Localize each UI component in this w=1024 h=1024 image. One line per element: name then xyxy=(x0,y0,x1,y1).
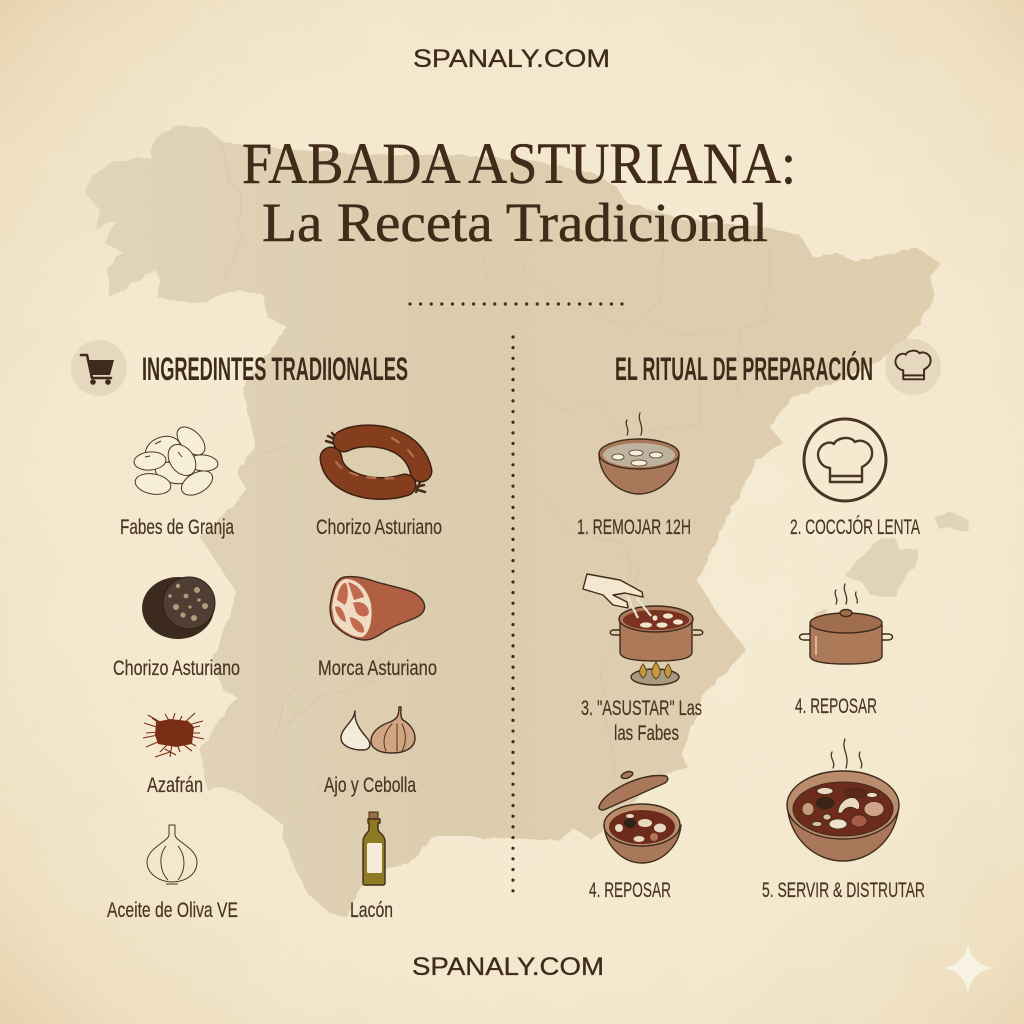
mainland silhouette xyxy=(85,125,940,917)
preparation heading xyxy=(615,339,941,395)
icon: bowl with lifted lid xyxy=(599,770,681,863)
icon: olive oil bottle xyxy=(363,812,385,885)
ingredient: morca xyxy=(318,577,437,680)
title line 1: FABADA ASTURIANA: xyxy=(242,131,796,196)
label: 4. REPOSAR xyxy=(795,695,877,718)
label: Fabes de Granja xyxy=(120,516,234,539)
label: Aceite de Oliva VE xyxy=(107,899,238,922)
step 5: resting bowl xyxy=(589,770,681,902)
icon: blood sausage xyxy=(142,577,215,639)
icon: hand, pot and burner xyxy=(583,574,703,685)
ingredient: morcilla xyxy=(113,577,240,680)
ingredient: aceite xyxy=(107,825,238,922)
label line 1: 3. "ASUSTAR" Las xyxy=(581,697,702,720)
label: 5. SERVIR & DISTRUTAR xyxy=(762,879,925,902)
panel: preparation xyxy=(577,339,941,902)
label: Chorizo Asturiano xyxy=(316,516,442,539)
title line 2: La Receta Tradicional xyxy=(262,192,768,253)
brand top: SPANALY.COM xyxy=(413,45,610,73)
Mallorca xyxy=(845,538,918,597)
ingredients heading xyxy=(71,340,408,396)
brand bottom: SPANALY.COM xyxy=(412,953,604,981)
label: Chorizo Asturiano xyxy=(113,657,240,680)
icon: chef hat in circle xyxy=(804,419,886,501)
step 4 xyxy=(795,584,892,718)
map region borders xyxy=(222,145,770,810)
icon: garlic bulb outline xyxy=(147,825,197,884)
icon: chorizo ring xyxy=(326,433,425,492)
label: Morca Asturiano xyxy=(318,657,437,680)
icon: beans xyxy=(133,422,219,500)
label xyxy=(581,697,702,745)
Ibiza xyxy=(810,609,828,622)
icon: soaking bowl xyxy=(599,413,679,494)
ingredient: ajo y cebolla xyxy=(324,707,416,797)
step 6: serve xyxy=(762,739,925,902)
icon: ham xyxy=(330,577,425,640)
icon: sparkle xyxy=(944,944,993,993)
step 2 xyxy=(790,419,920,539)
label: Azafrán xyxy=(147,774,203,797)
ingredient: fabes xyxy=(120,422,234,539)
map of Spain xyxy=(85,125,968,917)
icon: covered pot xyxy=(800,584,892,664)
step 3 xyxy=(581,574,703,745)
label: 4. REPOSAR xyxy=(589,879,671,902)
dotted separator xyxy=(410,302,622,306)
ingredient: lacon xyxy=(350,812,393,922)
ingredient: chorizo xyxy=(316,433,442,539)
step 1 xyxy=(577,413,691,539)
heading text: INGREDINTES TRADIIONALES xyxy=(142,351,408,387)
label line 2: las Fabes xyxy=(614,722,679,745)
icon: garlic clove and onion xyxy=(341,707,415,753)
label: Lacón xyxy=(350,899,393,922)
label: 2. COCCJÓR LENTA xyxy=(790,516,920,539)
title xyxy=(242,131,796,253)
panel: ingredients xyxy=(71,340,442,922)
dotted column divider xyxy=(511,337,515,895)
label: 1. REMOJAR 12H xyxy=(577,516,691,539)
ingredient: azafran xyxy=(143,713,204,797)
icon: cart xyxy=(71,340,127,396)
icon: chef hat badge xyxy=(885,339,941,395)
icon: saffron xyxy=(143,713,204,757)
Menorca xyxy=(935,512,968,532)
icon: large stew bowl xyxy=(787,739,899,861)
label: Ajo y Cebolla xyxy=(324,774,416,797)
